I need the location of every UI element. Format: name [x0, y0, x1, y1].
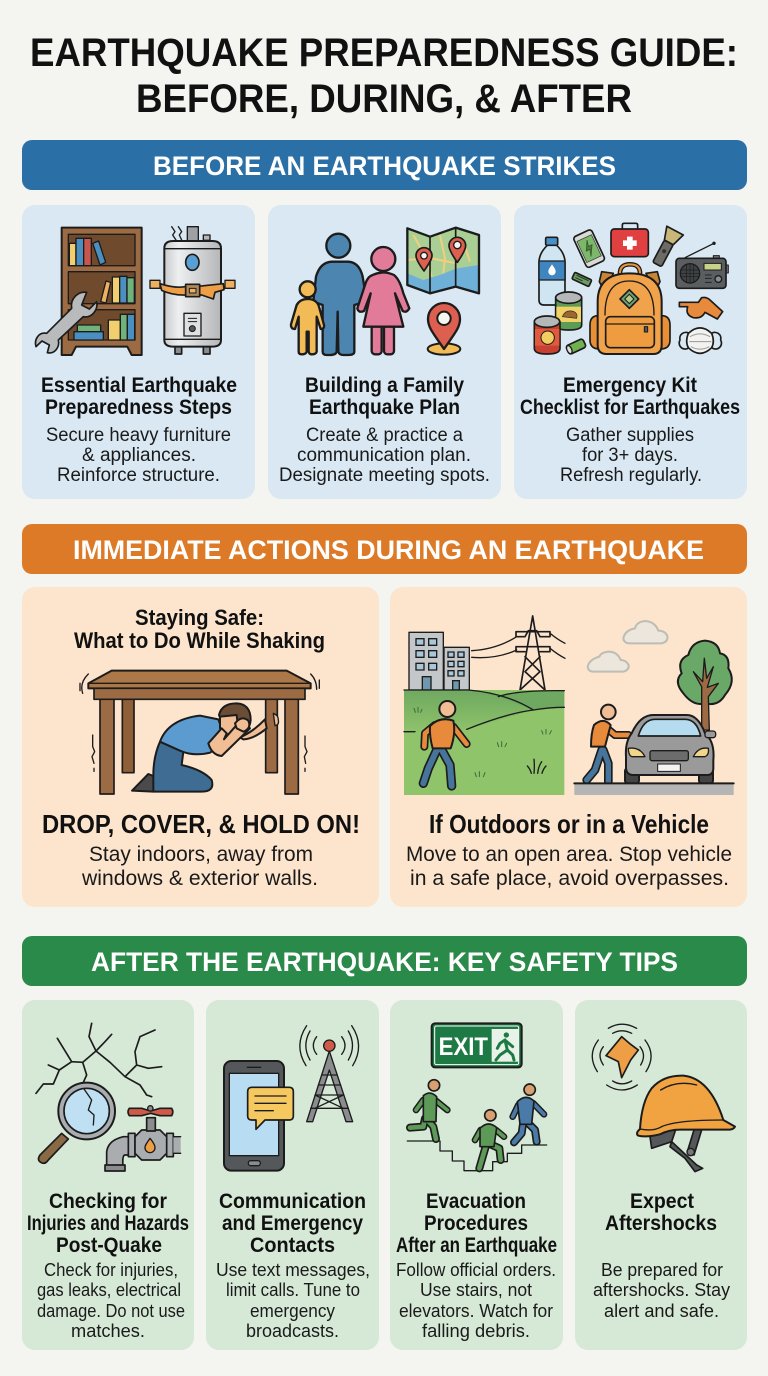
- heading: Checking for: [49, 1190, 167, 1213]
- text block: in a safe place, avoid overpasses.: [410, 867, 729, 890]
- heading: Communication: [219, 1190, 366, 1213]
- text block: [37, 1260, 185, 1341]
- panel: emergency kit checklist: [514, 205, 747, 499]
- text block: aftershocks. Stay: [593, 1280, 730, 1300]
- icon: family with map and location pin: [291, 228, 479, 355]
- heading: [605, 1190, 717, 1235]
- icon: smartphone with message and signal tower: [224, 1026, 359, 1171]
- text block: Secure heavy furniture: [46, 425, 231, 446]
- heading: Contacts: [250, 1234, 335, 1257]
- section banner: after the earthquake: AFTER THE EARTHQUAKE: KEY SAFETY TIPS: [91, 947, 678, 977]
- heading: [305, 374, 464, 419]
- heading: If Outdoors or in a Vehicle: [429, 809, 709, 839]
- text block: limit calls. Tune to: [226, 1280, 360, 1300]
- heading: Procedures: [424, 1212, 528, 1235]
- heading: Emergency Kit: [563, 374, 697, 397]
- text block: [396, 1260, 556, 1341]
- heading: Earthquake Plan: [309, 396, 460, 419]
- heading: What to Do While Shaking: [74, 628, 325, 653]
- text block: Create & practice a: [306, 425, 463, 446]
- heading: [27, 1190, 189, 1257]
- icon: emergency kit backpack and supplies: [534, 223, 728, 355]
- panel: expect aftershocks: [575, 1000, 747, 1350]
- section banner: during an earthquake: [22, 524, 747, 574]
- icon: wall cracks, magnifier and gas valve: [36, 1023, 181, 1171]
- text block: Check for injuries,: [44, 1260, 178, 1280]
- text block: [279, 425, 490, 486]
- text block: [406, 843, 732, 890]
- text block: [216, 1260, 370, 1341]
- text block: Use stairs, not: [420, 1280, 532, 1300]
- panel: staying safe while shaking: [22, 587, 379, 907]
- text block: Use text messages,: [216, 1260, 370, 1280]
- text block: communication plan.: [297, 445, 471, 466]
- panel: outdoors or in a vehicle: [390, 587, 747, 907]
- text block: Be prepared for: [601, 1260, 723, 1280]
- icon: bookshelf, wrench and strapped water heater: [36, 227, 235, 355]
- section banner: during an earthquake: IMMEDIATE ACTIONS DURING AN EARTHQUAKE: [73, 535, 704, 565]
- heading: Staying Safe:: [135, 605, 264, 630]
- text block: gas leaks, electrical: [37, 1280, 181, 1300]
- heading: Essential Earthquake: [41, 374, 237, 397]
- heading: Aftershocks: [605, 1212, 717, 1235]
- heading: [41, 374, 237, 419]
- text block: Refresh regularly.: [560, 465, 702, 486]
- icon: exit sign and people on stairs: EXIT: [439, 1033, 488, 1061]
- heading: Expect: [630, 1190, 694, 1213]
- heading: [396, 1190, 557, 1257]
- panel: essential preparedness steps: [22, 205, 255, 499]
- heading: Preparedness Steps: [45, 396, 232, 419]
- heading: Injuries and Hazards: [27, 1212, 189, 1235]
- heading: Evacuation: [426, 1190, 526, 1213]
- icon: exit sign and people on stairs: [407, 1023, 547, 1171]
- icon: person taking cover under a table: [80, 671, 319, 794]
- text block: [560, 425, 702, 486]
- text block: matches.: [71, 1321, 145, 1341]
- text block: Gather supplies: [566, 425, 694, 446]
- heading: [520, 374, 740, 419]
- heading: Building a Family: [305, 374, 464, 397]
- text block: [81, 843, 318, 890]
- text block: [593, 1260, 730, 1321]
- text block: [46, 425, 231, 486]
- heading: drop cover hold on: DROP, COVER, & HOLD ON!: [42, 809, 360, 839]
- text block: Reinforce structure.: [57, 465, 220, 486]
- text block: windows & exterior walls.: [81, 867, 318, 890]
- section banner: before an earthquake: BEFORE AN EARTHQUAKE STRIKES: [153, 151, 616, 181]
- text block: emergency: [250, 1301, 335, 1321]
- text block: falling debris.: [422, 1321, 530, 1341]
- icon: hard hat and shaking lightning symbol: [592, 1024, 735, 1172]
- section banner: after the earthquake: [22, 936, 747, 986]
- heading: [219, 1190, 366, 1257]
- panel: checking for injuries and hazards: [22, 1000, 194, 1350]
- heading: After an Earthquake: [396, 1234, 557, 1257]
- heading: and Emergency: [222, 1212, 363, 1235]
- panel: evacuation procedures: [390, 1000, 563, 1350]
- text block: Stay indoors, away from: [89, 843, 313, 866]
- icon: person walking in open field: [404, 616, 734, 795]
- title: [30, 31, 738, 121]
- title: BEFORE, DURING, & AFTER: [136, 77, 632, 121]
- text block: damage. Do not use: [37, 1301, 185, 1321]
- text block: & appliances.: [82, 445, 196, 466]
- text block: alert and safe.: [604, 1301, 719, 1321]
- text block: Designate meeting spots.: [279, 465, 490, 486]
- panel: family earthquake plan: [268, 205, 501, 499]
- panel: communication and emergency contacts: [206, 1000, 379, 1350]
- section banner: before an earthquake: [22, 140, 747, 190]
- text block: for 3+ days.: [582, 445, 678, 466]
- heading: Post-Quake: [56, 1234, 162, 1257]
- text block: elevators. Watch for: [399, 1301, 553, 1321]
- text block: Follow official orders.: [396, 1260, 556, 1280]
- text block: Move to an open area. Stop vehicle: [406, 843, 732, 866]
- text block: broadcasts.: [246, 1321, 339, 1341]
- heading: [74, 605, 325, 653]
